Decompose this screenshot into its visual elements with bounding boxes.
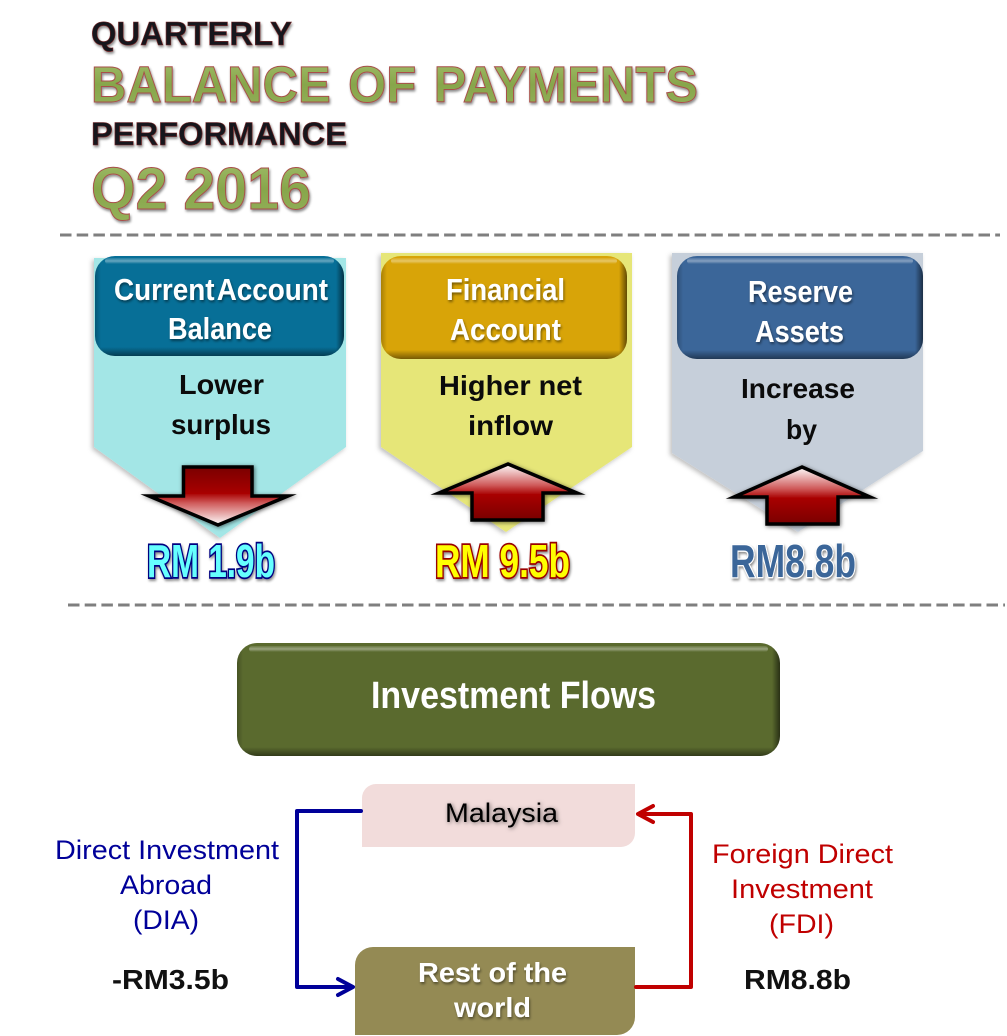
description bbox=[741, 373, 855, 445]
value: fdi: RM8.8b bbox=[744, 964, 851, 995]
label: foreign direct investment: Foreign Direct bbox=[712, 839, 894, 869]
description bbox=[171, 369, 271, 440]
value: dia: -RM3.5b bbox=[112, 964, 229, 995]
description: inflow bbox=[468, 410, 553, 441]
label: direct investment abroad bbox=[55, 835, 280, 935]
header: reserve assets: Assets bbox=[755, 314, 844, 349]
arrow: foreign direct investment bbox=[636, 806, 691, 987]
box: rest of the world bbox=[355, 947, 635, 1035]
description: Increase bbox=[741, 373, 855, 404]
icon: up arrow bbox=[439, 464, 577, 520]
label: foreign direct investment: Investment bbox=[731, 874, 874, 904]
label: foreign direct investment: (FDI) bbox=[769, 909, 834, 939]
box: malaysia bbox=[362, 784, 635, 847]
box: malaysia: Malaysia bbox=[445, 798, 559, 828]
title line: balance of payments: BALANCE OF PAYMENTS bbox=[91, 56, 698, 113]
header: financial account: Account bbox=[450, 312, 561, 347]
box: rest of the world: world bbox=[453, 992, 531, 1023]
value: RM 1.9b bbox=[147, 535, 275, 587]
description: Higher net bbox=[439, 370, 582, 401]
pentagon background bbox=[381, 253, 632, 532]
pentagon background bbox=[94, 258, 346, 538]
header: reserve assets: Reserve bbox=[748, 274, 853, 309]
title line: performance: PERFORMANCE bbox=[91, 116, 347, 152]
label: direct investment abroad: Abroad bbox=[120, 870, 212, 900]
label: direct investment abroad: (DIA) bbox=[133, 905, 199, 935]
panel: financial account bbox=[381, 253, 632, 587]
panel: reserve assets bbox=[672, 253, 923, 587]
description: Lower bbox=[179, 369, 264, 400]
header: current account balance bbox=[95, 256, 344, 356]
box: rest of the world: Rest of the bbox=[418, 957, 567, 988]
icon: up arrow bbox=[734, 467, 870, 524]
header: financial account: Financial bbox=[446, 272, 565, 307]
description: surplus bbox=[171, 409, 271, 440]
title bbox=[91, 15, 698, 222]
pentagon background bbox=[672, 253, 923, 532]
description bbox=[439, 370, 582, 441]
label: direct investment abroad: Direct Investment bbox=[55, 835, 280, 865]
heading: investment flows bbox=[237, 643, 780, 756]
label: foreign direct investment bbox=[712, 839, 894, 939]
header: current account balance: Balance bbox=[168, 311, 272, 346]
value: RM8.8b bbox=[730, 535, 856, 587]
title line: quarterly: QUARTERLY bbox=[91, 15, 292, 52]
icon: down arrow bbox=[149, 467, 288, 525]
description: by bbox=[786, 414, 817, 445]
value: RM 9.5b bbox=[435, 535, 570, 587]
panel: current account balance bbox=[94, 256, 346, 587]
flow diagram bbox=[55, 784, 894, 1035]
arrow: direct investment abroad bbox=[297, 811, 361, 995]
header: financial account bbox=[381, 256, 627, 359]
header: current account balance: Current Account bbox=[114, 272, 328, 307]
title line: quarter: Q2 2016 bbox=[91, 156, 311, 222]
header: reserve assets bbox=[677, 256, 923, 359]
heading: investment flows: Investment Flows bbox=[371, 675, 656, 717]
